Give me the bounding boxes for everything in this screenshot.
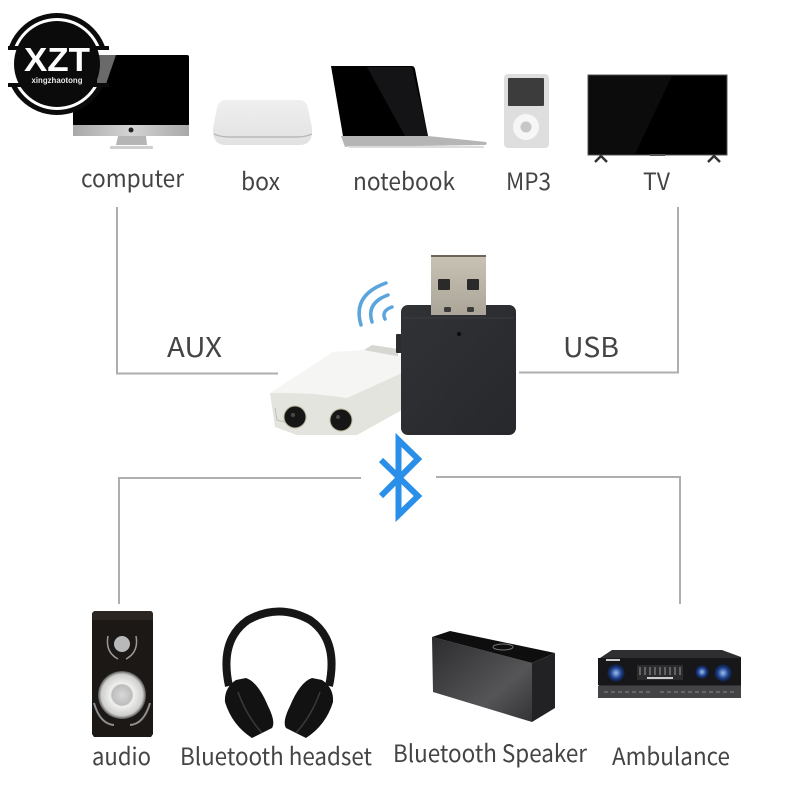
connector line: AUX to computer <box>117 207 278 374</box>
icon: Bluetooth <box>381 440 418 515</box>
label: notebook: notebook <box>353 162 455 197</box>
logo: XZT <box>6 13 109 115</box>
label: TV: TV <box>643 162 670 197</box>
label: box: box <box>241 162 280 197</box>
logo: XZT: XZT <box>24 41 90 78</box>
white adapter <box>270 345 402 435</box>
label: computer: computer <box>81 159 185 194</box>
icon: wireless signal <box>359 283 392 325</box>
icon: computer <box>73 55 189 149</box>
connector line: Bluetooth to ambulance <box>436 477 680 604</box>
icon: Bluetooth headset <box>225 612 333 738</box>
icon: audio speaker <box>92 611 153 737</box>
logo: XZT: xingzhaotong <box>32 76 83 85</box>
icon: box <box>213 100 312 145</box>
label: Ambulance: Ambulance <box>612 737 730 772</box>
label: Bluetooth Speaker: Bluetooth Speaker <box>393 734 588 769</box>
label: audio: audio <box>92 737 151 772</box>
label: USB: USB <box>563 326 619 365</box>
connector line: Bluetooth to audio <box>119 478 361 604</box>
label: MP3: MP3 <box>506 162 551 197</box>
icon: amplifier <box>598 650 741 698</box>
label: AUX: AUX <box>167 326 223 365</box>
icon: notebook <box>331 66 487 148</box>
label: Bluetooth headset: Bluetooth headset <box>180 737 372 772</box>
icon: TV <box>588 75 727 162</box>
icon: Bluetooth speaker <box>432 631 555 722</box>
black USB adapter <box>396 255 516 435</box>
icon: MP3 player <box>504 74 549 148</box>
connector line: USB to TV <box>519 207 678 372</box>
